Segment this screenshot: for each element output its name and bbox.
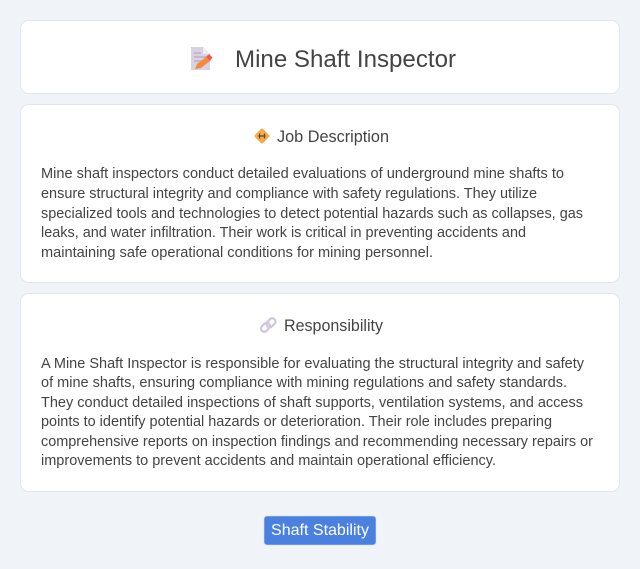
button: shaft stability [264, 516, 376, 545]
text block: job description: Mine shaft inspectors conduct detailed evaluations of underground mine shafts to [41, 166, 564, 182]
icon: document with pencil [191, 47, 212, 70]
panel: job description [20, 104, 620, 282]
text block: job description: ensure structural integrity and compliance with safety regulations. They utilize [41, 186, 537, 202]
heading: responsibility: Responsibility [284, 317, 384, 335]
panel: title card [20, 20, 620, 94]
icon: chain link [260, 317, 277, 333]
text block: responsibility: They conduct detailed inspections of shaft supports, ventilation systems, and access [41, 395, 583, 411]
text block: job description: leaks, and water infiltration. Their work is critical in preventing accidents and [41, 225, 526, 241]
title: Mine Shaft Inspector [235, 46, 456, 73]
text block: responsibility [41, 356, 593, 469]
icon: warning diamond [254, 128, 270, 144]
text block: job description: specialized tools and technologies to detect potential hazards such as collapses, gas [41, 206, 583, 222]
text block: responsibility: improvements to prevent accidents and maintain operational efficiency. [41, 453, 496, 469]
text block: responsibility: A Mine Shaft Inspector is responsible for evaluating the structural integrity and safety [41, 356, 585, 372]
panel: responsibility [20, 294, 620, 492]
button: shaft stability: Shaft Stability [271, 522, 369, 539]
text block: job description: maintaining safe operational conditions for mining personnel. [41, 245, 433, 261]
heading: job description: Job Description [277, 128, 389, 146]
text block: responsibility: comprehensive reports on inspection findings and recommending necessary repairs or [41, 434, 593, 450]
text block: job description [41, 166, 583, 261]
text block: responsibility: of mine shafts, ensuring compliance with mining regulations and safety standards. [41, 375, 567, 391]
text block: responsibility: points to identify potential hazards or deterioration. Their role includes preparing [41, 414, 552, 430]
